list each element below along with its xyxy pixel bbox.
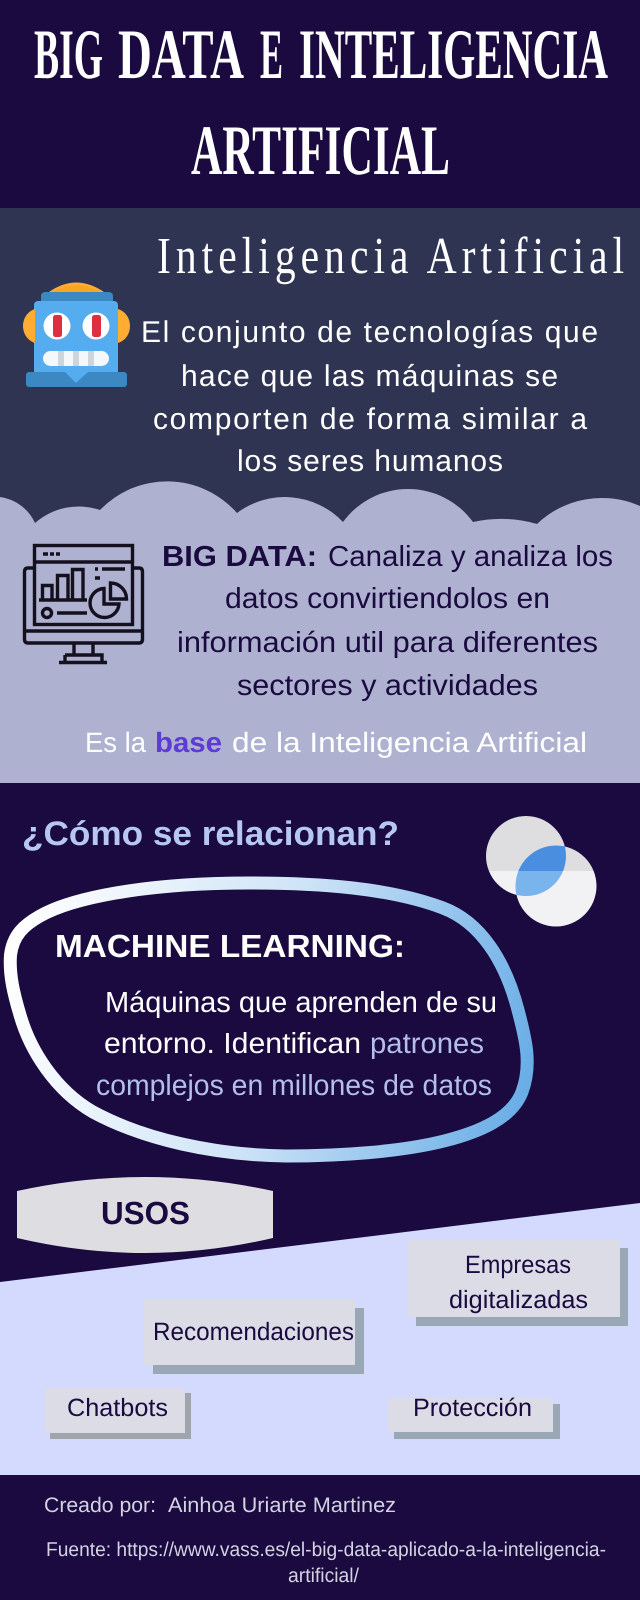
credit: source: Fuente: https://www.vass.es/el-big-data-aplicado-a-la-inteligencia- (46, 1539, 606, 1561)
text: big data definition: información util para diferentes (177, 627, 598, 659)
card: proteccion: Protección (413, 1394, 532, 1422)
icon: robot (23, 282, 130, 387)
panel: header (0, 0, 640, 208)
text: machine learning definition: complejos en millones de datos (96, 1070, 492, 1102)
card: proteccion (388, 1394, 560, 1439)
card: recomendaciones (144, 1299, 364, 1374)
title: BIG (34, 16, 103, 94)
title: ARTIFICIAL (191, 112, 450, 190)
card: empresas digitalizadas: Empresas (465, 1251, 571, 1279)
credit: author (44, 1494, 396, 1517)
title: DATA (118, 16, 244, 94)
credit: source (46, 1539, 606, 1587)
heading: machine learning: MACHINE LEARNING: (55, 928, 405, 964)
card: chatbots: Chatbots (67, 1394, 168, 1422)
credit: author: Creado por: (44, 1494, 156, 1517)
text: machine learning definition (96, 987, 497, 1102)
heading: como se relacionan: ¿Cómo se relacionan? (22, 815, 399, 853)
panel: relation section (4, 816, 596, 1162)
card: recomendaciones: Recomendaciones (153, 1318, 354, 1346)
subtitle: Inteligencia Artificial (157, 228, 624, 285)
text: big data definition: Canaliza y analiza los (328, 541, 613, 573)
card: chatbots (45, 1388, 191, 1439)
icon: venn diagram (486, 816, 596, 926)
panel: big data (0, 481, 640, 783)
text: definition of artificial intelligence: hace que las máquinas se (181, 360, 558, 393)
text: base of artificial intelligence (85, 727, 587, 758)
text: machine learning definition: patrones (370, 1028, 484, 1060)
card: empresas digitalizadas: digitalizadas (449, 1286, 588, 1314)
text: base of artificial intelligence: Es la (85, 727, 146, 758)
text: definition of artificial intelligence: comporten de forma similar a (153, 403, 587, 436)
usos badge: USOS (101, 1195, 190, 1231)
usos badge (17, 1177, 273, 1253)
credit: source: artificial/ (288, 1565, 359, 1587)
text: big data definition (162, 541, 613, 702)
panel: usos (0, 1177, 640, 1475)
panel: inteligencia artificial (0, 208, 640, 528)
panel: footer (0, 1475, 640, 1600)
title: E (260, 16, 283, 94)
text: big data definition: sectores y actividades (237, 670, 538, 702)
title (34, 16, 608, 190)
text: machine learning definition: entorno. Identifican (104, 1028, 361, 1060)
text: definition of artificial intelligence: los seres humanos (237, 445, 503, 478)
outlined blob (10, 883, 527, 1156)
icon: monitor with charts (24, 546, 142, 662)
text: machine learning definition: Máquinas que aprenden de su (105, 987, 497, 1019)
text: definition of artificial intelligence: El conjunto de tecnologías que (141, 316, 598, 349)
text: big data definition: datos convirtiendolos en (225, 583, 550, 615)
text: big data definition: BIG DATA: (162, 541, 317, 573)
text: base of artificial intelligence: base (155, 727, 222, 758)
text: base of artificial intelligence: de la Inteligencia Artificial (232, 727, 587, 758)
card: empresas digitalizadas (408, 1240, 628, 1326)
credit: author: Ainhoa Uriarte Martinez (168, 1494, 396, 1517)
text: definition of artificial intelligence (141, 316, 598, 478)
